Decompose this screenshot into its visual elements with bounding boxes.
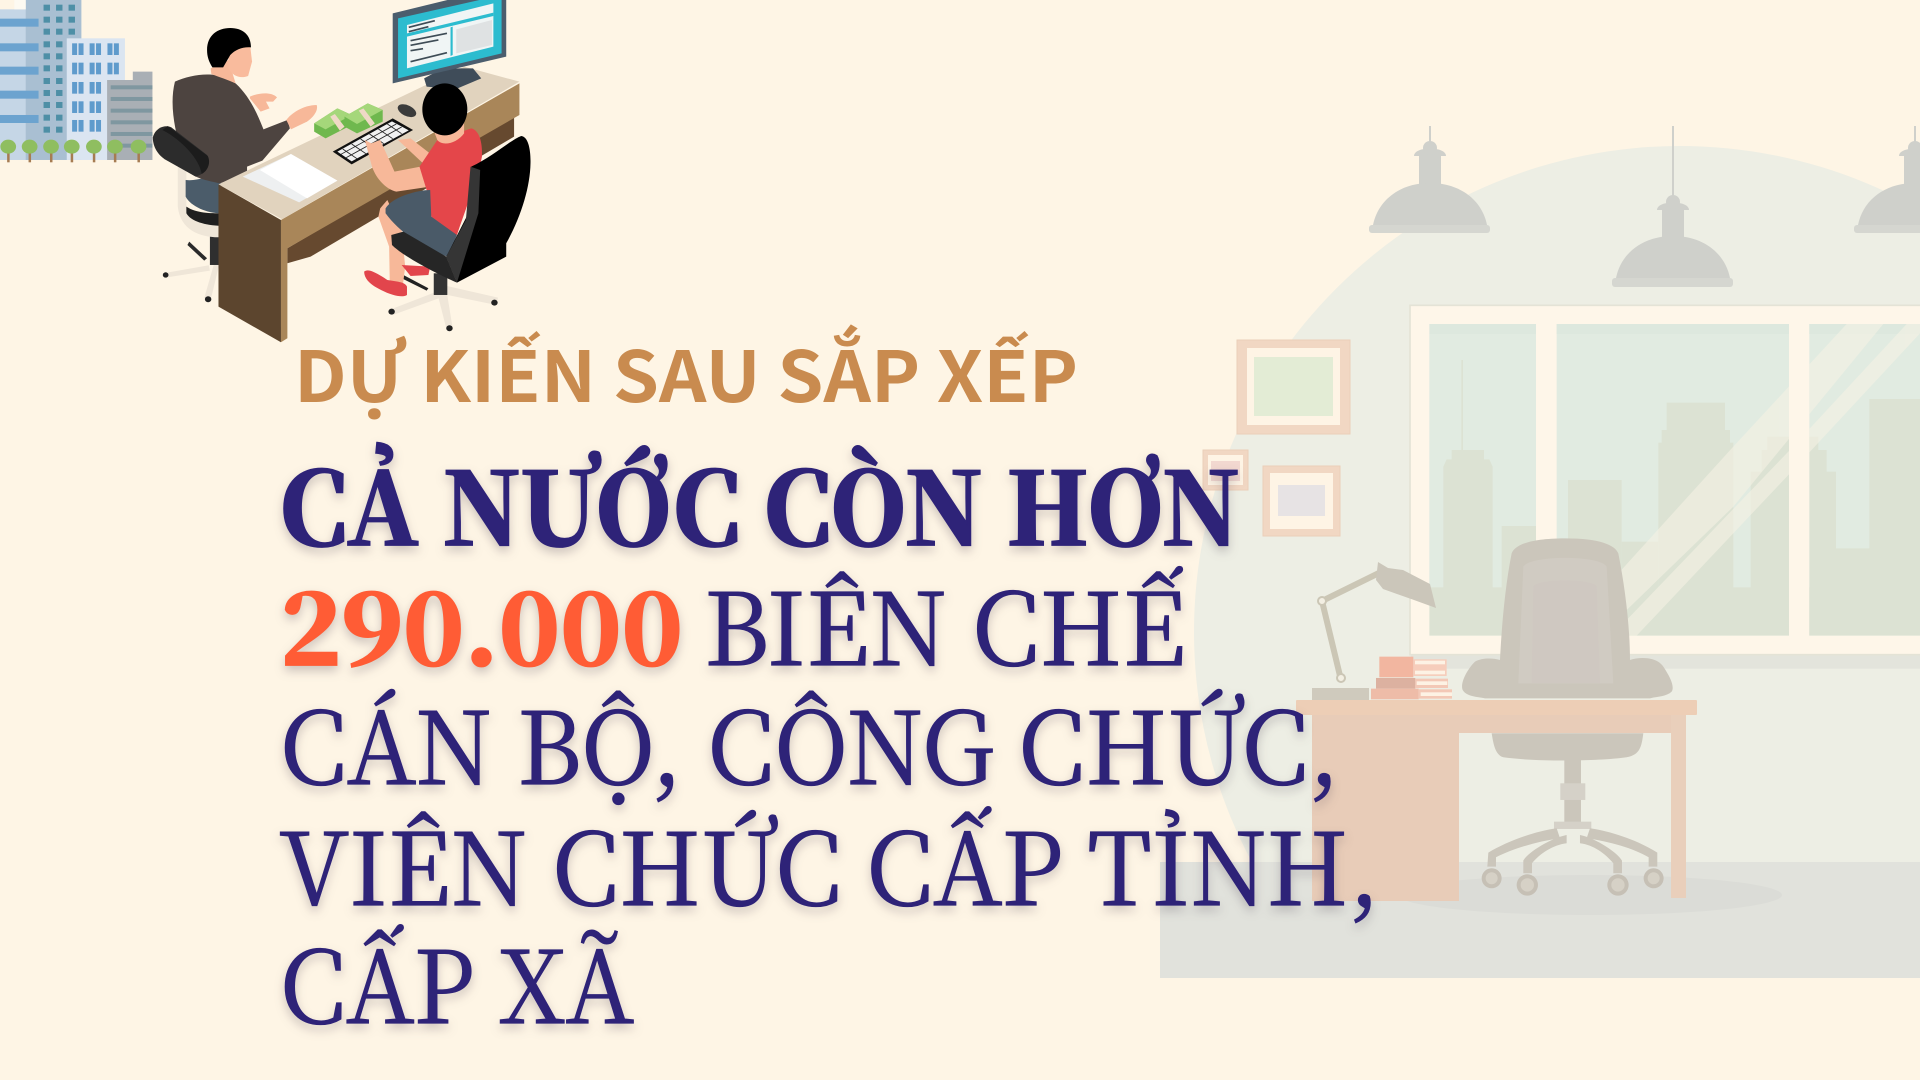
picture frames (1203, 340, 1350, 536)
key number: 290.000 (280, 550, 683, 694)
office chair (1462, 538, 1673, 896)
woman's chair base (388, 273, 498, 331)
desk lamp (1312, 562, 1436, 700)
window (1410, 305, 1920, 669)
money stacks (314, 103, 383, 138)
desk (218, 67, 519, 342)
headline line 2: BIÊN CHẾ (704, 550, 1186, 694)
wall circle (1194, 146, 1920, 862)
computer mouse (395, 102, 418, 120)
man (153, 28, 317, 213)
woman (364, 83, 531, 296)
headline line 1: CẢ NƯỚC CÒN HƠN (280, 430, 1240, 574)
office desk (1296, 700, 1697, 901)
headline line 5: CẤP XÃ (280, 908, 634, 1052)
floor shadow (1398, 875, 1782, 915)
headline (280, 430, 1380, 1052)
trees (0, 140, 146, 162)
illustration: two people at desk (153, 0, 531, 342)
man's chair (163, 167, 221, 302)
floor (1160, 862, 1920, 978)
headline line 4: VIÊN CHỨC CẤP TỈNH, (280, 790, 1380, 934)
keyboard (333, 118, 413, 164)
subheading: DỰ KIẾN SAU SẮP XẾP (294, 322, 1078, 423)
paper (243, 154, 337, 202)
books (1371, 657, 1452, 699)
headline line 3: CÁN BỘ, CÔNG CHỨC, (280, 669, 1340, 813)
city buildings (0, 0, 152, 162)
ceiling lamps (1369, 126, 1920, 287)
office background illustration (1160, 126, 1920, 978)
computer monitor (393, 0, 506, 89)
